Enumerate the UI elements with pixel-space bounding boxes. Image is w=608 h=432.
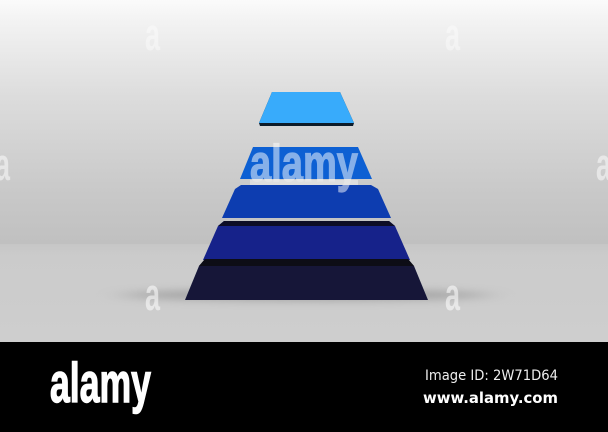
watermark letter: bottom left: a	[145, 269, 161, 320]
watermark letter: top right: a	[445, 9, 461, 60]
tier 4: dark blue band	[203, 221, 410, 260]
footer logo: alamy: alamy	[50, 351, 151, 414]
central watermark: alamy: alamy	[250, 135, 358, 193]
floor shadow	[121, 289, 491, 301]
watermark letter: bottom right: a	[445, 269, 461, 320]
black footer bar	[0, 342, 608, 432]
footer url: www.alamy.com	[423, 389, 558, 407]
background wall	[0, 0, 608, 244]
pyramid	[185, 92, 428, 300]
tier 1: top light blue slab	[259, 92, 354, 126]
tier 3: royal blue band	[222, 185, 391, 218]
tier 5: navy base band	[185, 259, 428, 300]
watermark line under logo	[250, 180, 358, 185]
tier 2: medium blue band	[240, 147, 372, 179]
floor	[0, 244, 608, 342]
footer image id: Image ID: 2W71D64	[425, 368, 558, 384]
watermark letter: top left: a	[145, 9, 161, 60]
